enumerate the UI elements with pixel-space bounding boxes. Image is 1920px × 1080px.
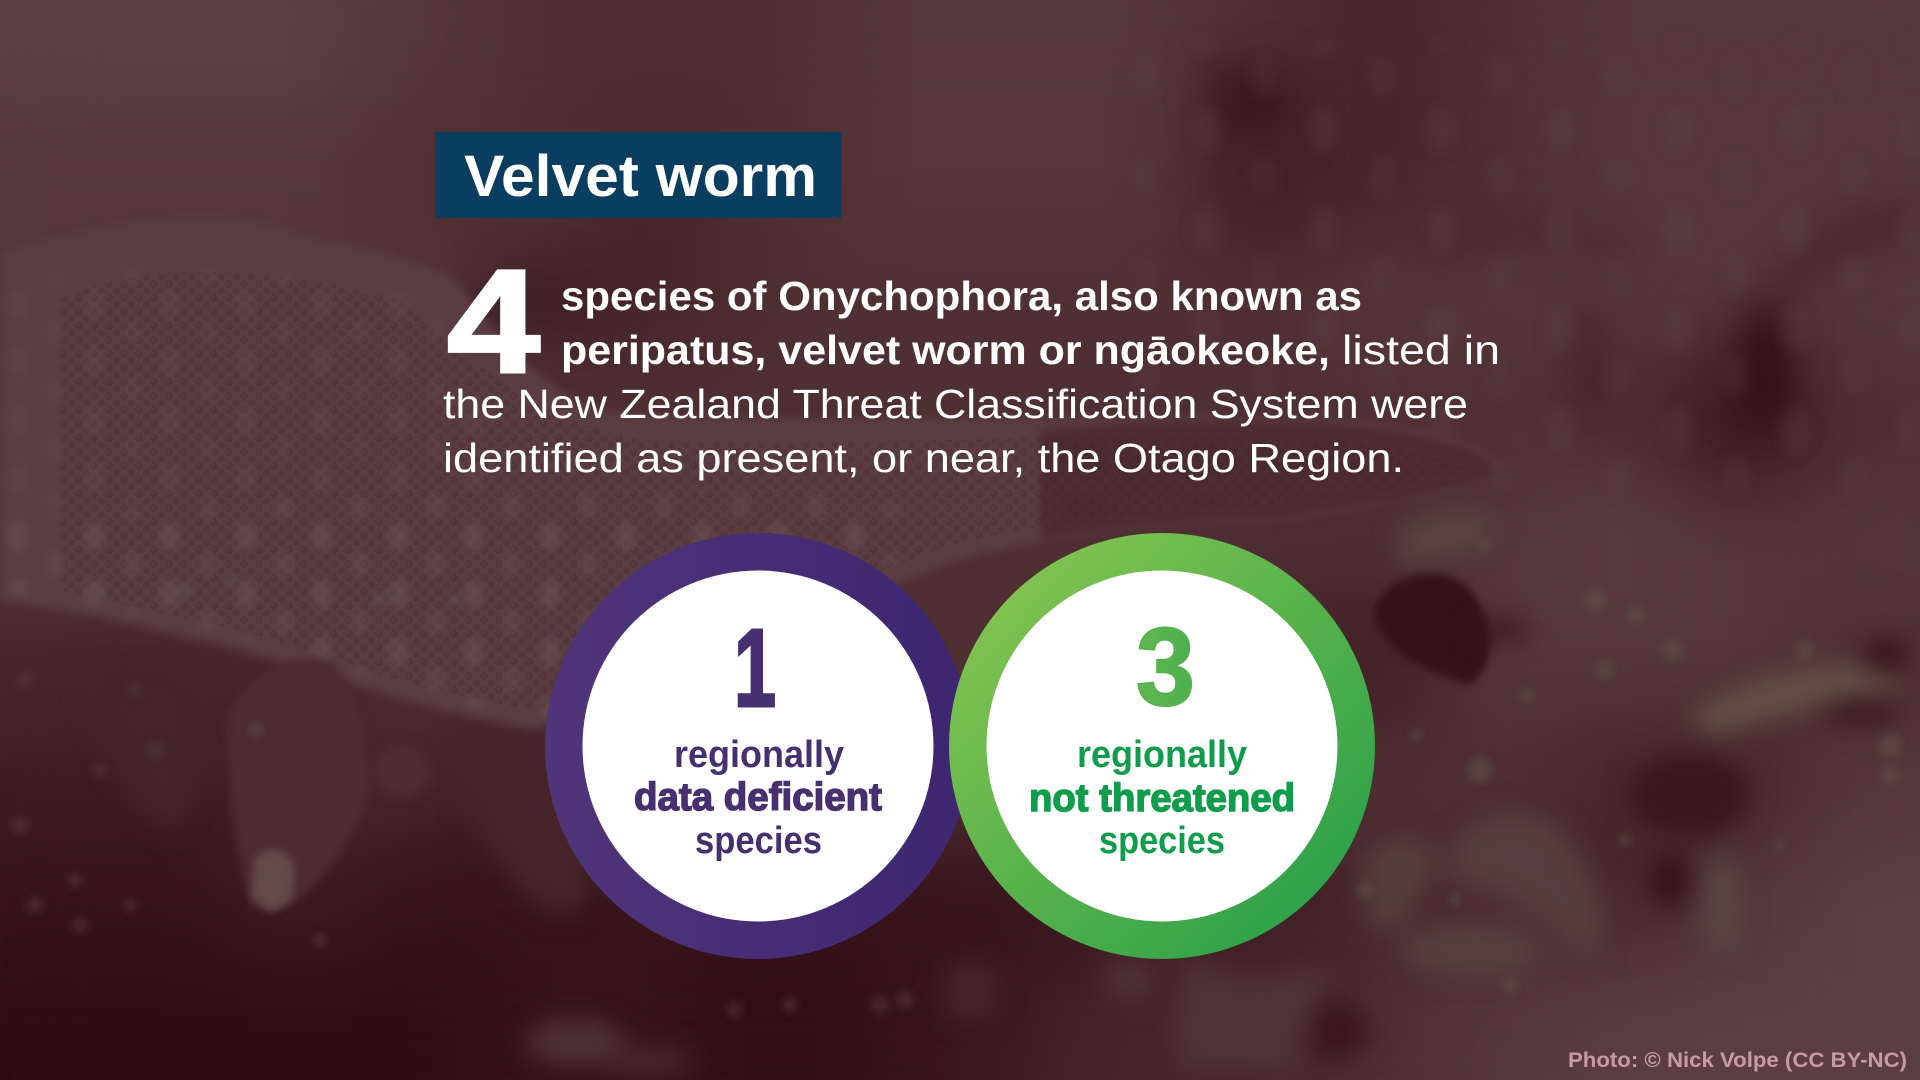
intro paragraph with large number: peripatus, velvet worm or ngāokeoke, (561, 327, 1330, 373)
stat circle: not threatened: 3 (1136, 606, 1195, 729)
worm head (1374, 573, 1491, 685)
intro paragraph with large number: listed in (1342, 327, 1500, 373)
stat circle: data deficient: regionally (674, 734, 844, 776)
worm body (0, 217, 1500, 730)
out-of-focus dots (94, 539, 1902, 993)
title (435, 132, 842, 218)
stat circle: not threatened (949, 533, 1375, 959)
stat circle: not threatened: species (1099, 820, 1225, 862)
moss and leaves (525, 512, 1909, 1078)
large number 4: 4 (447, 240, 540, 404)
stat circle: data deficient: data deficient (634, 776, 882, 819)
stat circle: data deficient: species (695, 820, 822, 862)
worm droplets (0, 490, 915, 720)
worm tail shade (1040, 421, 1495, 540)
intro paragraph with large number: identified as present, or near, the Otago Region. (443, 435, 1404, 481)
stat circle: not threatened: not threatened (1029, 777, 1295, 820)
intro paragraph with large number: the New Zealand Threat Classification System were (443, 381, 1468, 427)
stat circle: data deficient (545, 533, 971, 959)
photo credit: Photo: © Nick Volpe (CC BY-NC) (1568, 1049, 1907, 1072)
stat circle: not threatened: regionally (1077, 734, 1247, 776)
intro paragraph with large number (443, 240, 1500, 481)
stat circle: data deficient: 1 (734, 607, 776, 730)
legs (80, 650, 590, 918)
intro paragraph with large number: species of Onychophora, also known as (561, 273, 1362, 319)
upper out-of-focus worm details (470, 60, 1920, 431)
worm skin grain (60, 272, 1470, 710)
title: Velvet worm (464, 144, 817, 209)
